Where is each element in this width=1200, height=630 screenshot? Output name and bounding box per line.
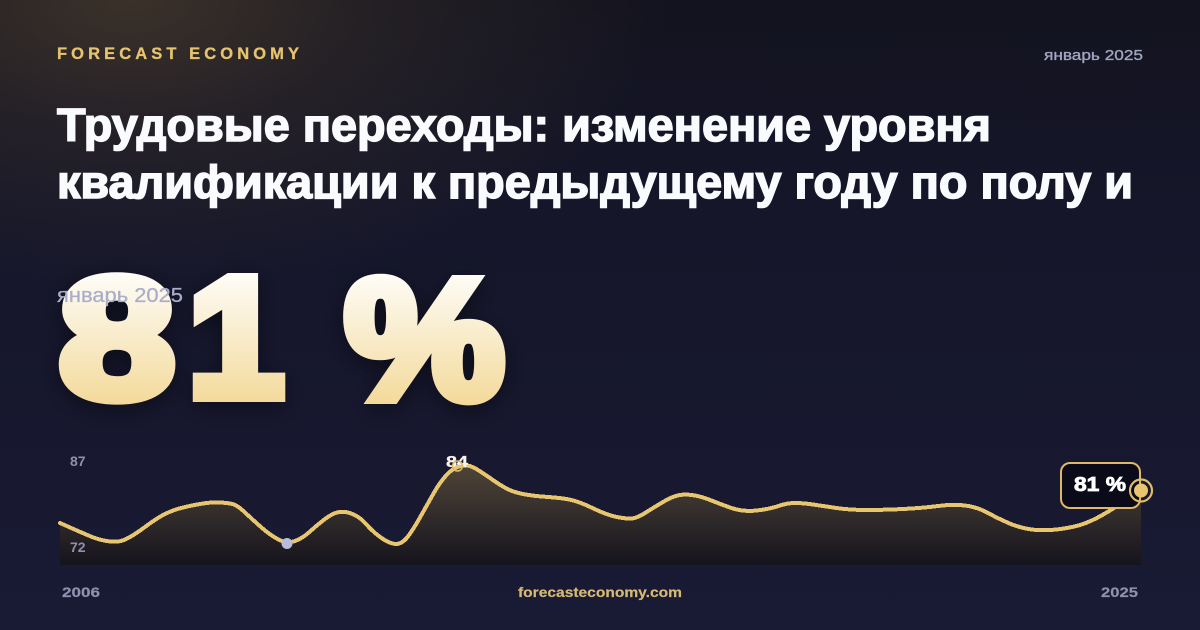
axis label 87: 87 (70, 453, 86, 469)
end callout: 81 % (1074, 474, 1126, 496)
chart (60, 453, 1152, 565)
title: Трудовые переходы: изменение уровня (57, 99, 991, 151)
end callout (1061, 463, 1140, 508)
peak marker (452, 461, 462, 471)
axis label 72: 72 (70, 539, 86, 555)
date subtitle: январь 2025 (57, 285, 183, 307)
title (57, 99, 1133, 208)
end year: 2025 (1101, 584, 1138, 600)
start year: 2006 (62, 584, 100, 600)
chart line (60, 465, 1141, 544)
big number: % (345, 245, 504, 435)
big number: 8 (60, 244, 174, 434)
minimum marker (282, 538, 292, 549)
peak label: 84 (446, 454, 468, 471)
big number: 1 (188, 243, 284, 433)
title: квалификации к предыдущему году по полу и (57, 156, 1133, 208)
chart area (60, 465, 1141, 565)
big number (60, 243, 504, 435)
date top right: январь 2025 (1044, 47, 1143, 64)
source url: forecasteconomy.com (518, 584, 682, 600)
end marker (1130, 480, 1152, 502)
brand label: FORECAST ECONOMY (57, 45, 299, 63)
